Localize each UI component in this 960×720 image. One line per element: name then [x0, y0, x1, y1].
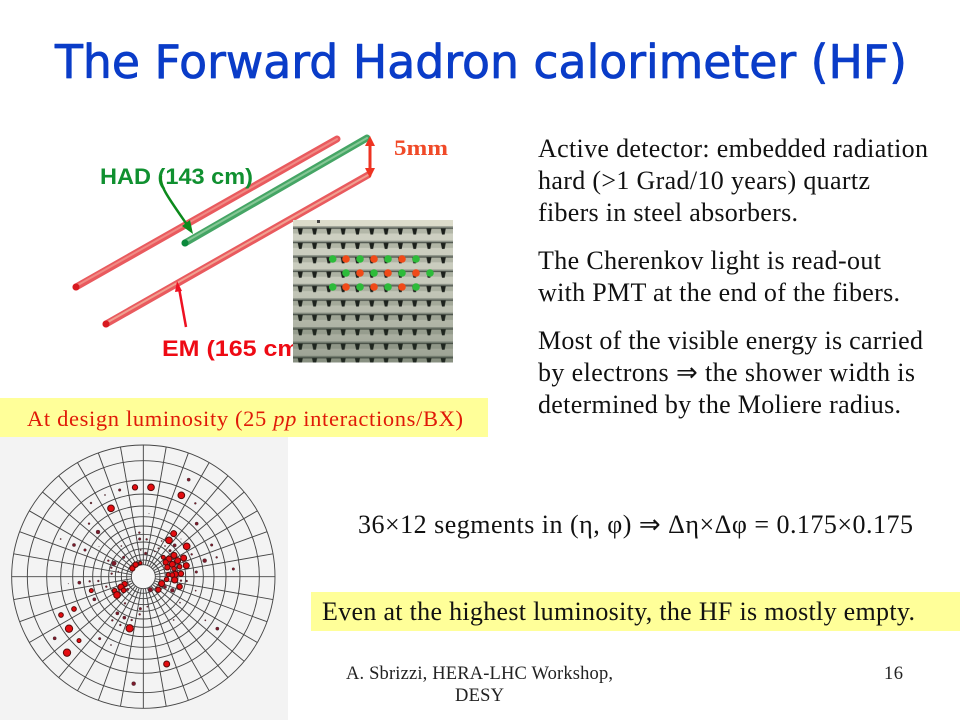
callout: design luminosity: At design luminosity (25 pp interactions/BX): [27, 406, 463, 431]
fiber dots: [329, 255, 434, 291]
description text: determined by the Moliere radius.: [538, 390, 901, 419]
lower red EM fiber: [102, 175, 368, 328]
title: The Forward Hadron calorimeter (HF): [54, 35, 907, 89]
photo: steel absorber with fibers: [293, 220, 453, 362]
upper red EM fiber: [72, 139, 337, 290]
description text: by electrons ⇒ the shower width is: [538, 358, 915, 387]
page number: 16: [884, 664, 903, 684]
5mm label: 5mm: [394, 135, 448, 160]
description text: hard (>1 Grad/10 years) quartz: [538, 166, 870, 195]
callout: design luminosity: [0, 398, 488, 437]
HAD arrow: [161, 176, 193, 234]
footer credit: A. Sbrizzi, HERA-LHC Workshop,: [346, 664, 613, 684]
callout: mostly empty: Even at the highest luminosity, the HF is mostly empty.: [322, 597, 915, 626]
EM arrow: [175, 281, 186, 327]
description text: Active detector: embedded radiation: [538, 134, 928, 163]
EM label: EM (165 cm): [162, 336, 308, 361]
energy deposits: small: [53, 478, 235, 686]
fiber diagram: [72, 135, 453, 362]
footer credit: DESY: [455, 686, 504, 706]
description text: The Cherenkov light is read-out: [538, 246, 882, 275]
segments formula: 36×12 segments in (η, φ) ⇒ Δη×Δφ = 0.175×0.175: [358, 510, 913, 539]
HAD label: HAD (143 cm): [100, 164, 253, 189]
energy deposits: red: [59, 484, 190, 667]
detector grid: [12, 445, 275, 708]
green HAD fiber: [182, 138, 367, 246]
description text: fibers in steel absorbers.: [538, 198, 798, 227]
description text: [538, 134, 928, 419]
footer credit: [346, 664, 613, 706]
5mm arrow: [365, 136, 375, 178]
description text: Most of the visible energy is carried: [538, 326, 923, 355]
polar occupancy map: [0, 437, 288, 720]
callout: mostly empty: [311, 592, 960, 631]
description text: with PMT at the end of the fibers.: [538, 278, 900, 307]
